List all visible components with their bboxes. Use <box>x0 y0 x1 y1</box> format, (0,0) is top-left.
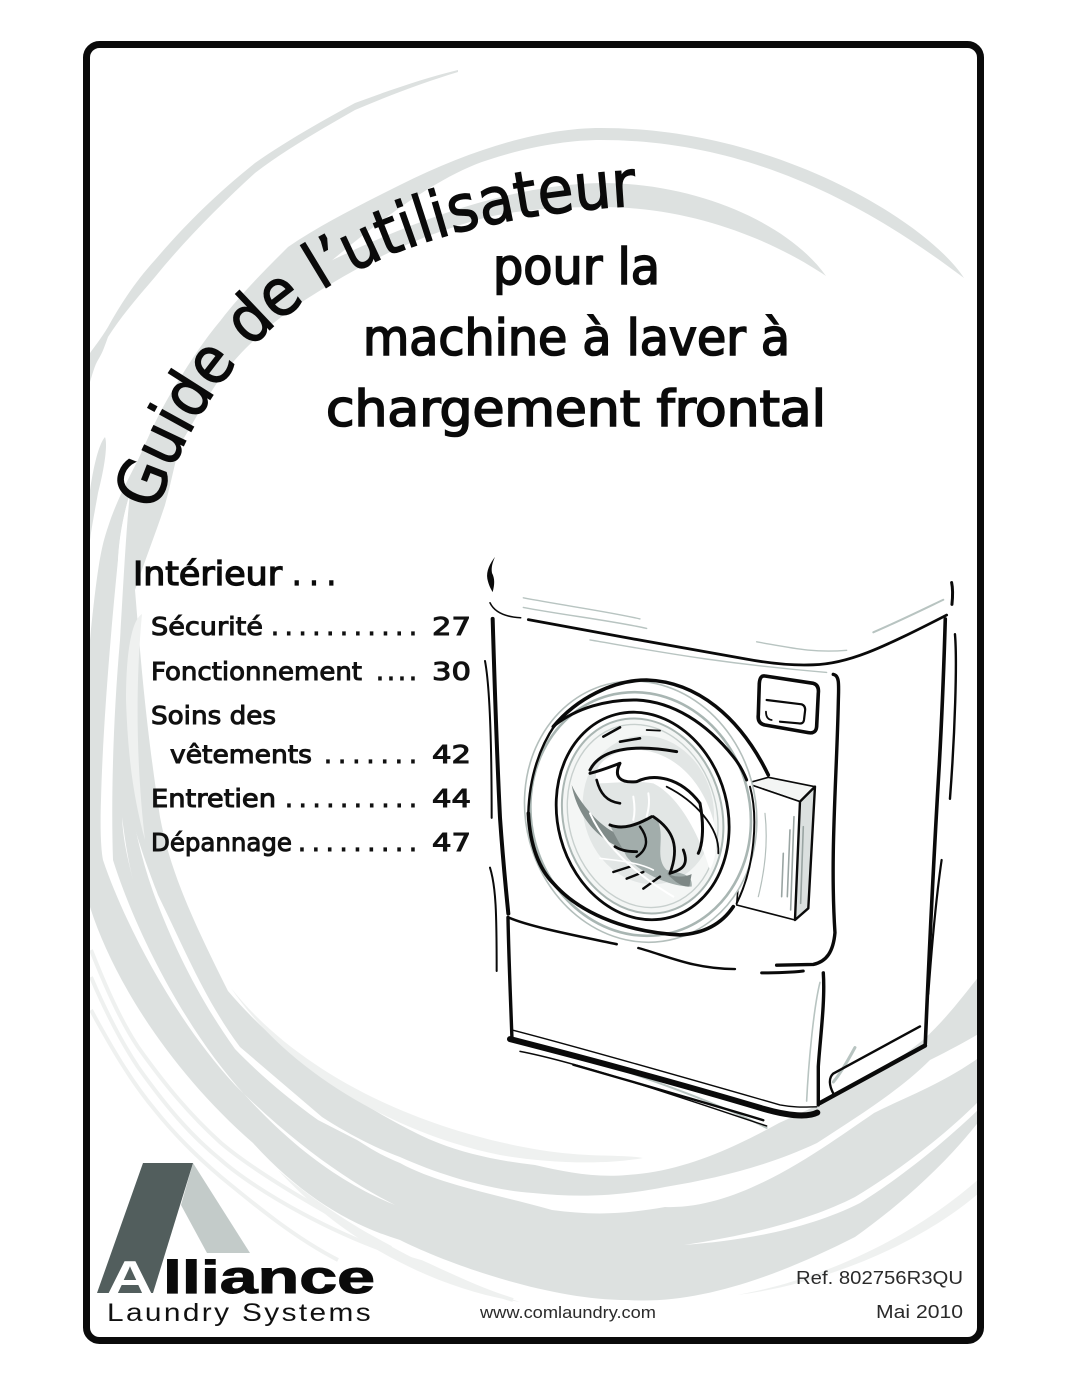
table of contents <box>151 612 471 857</box>
drum swirl <box>566 721 731 899</box>
reference number: Ref. 802756R3QU <box>796 1268 963 1288</box>
table of contents: . . . . . . . <box>324 740 417 769</box>
page frame <box>86 44 980 1340</box>
logo tagline: Laundry Systems <box>107 1299 373 1327</box>
table of contents: 42 <box>432 740 471 769</box>
logo wordmark <box>107 1251 375 1303</box>
table of contents: vêtements <box>170 740 312 769</box>
table of contents: . . . . . . . . . <box>298 828 417 857</box>
cabinet <box>485 557 956 1128</box>
table of contents: Soins des <box>151 701 276 730</box>
table of contents: Entretien <box>151 784 276 813</box>
website: www.comlaundry.com <box>479 1303 656 1322</box>
table of contents: 27 <box>432 612 471 641</box>
logo mark <box>97 1163 250 1293</box>
table of contents: Dépannage <box>151 828 292 857</box>
table of contents: 47 <box>432 828 471 857</box>
date: Mai 2010 <box>876 1302 963 1322</box>
contents heading: . . . <box>292 554 336 593</box>
background swirl <box>90 70 980 1302</box>
table of contents: 30 <box>432 657 471 686</box>
door ring <box>496 655 786 969</box>
door, drawer and handle <box>496 655 818 969</box>
logo wordmark: A <box>107 1251 153 1303</box>
contents heading: Intérieur <box>133 554 283 593</box>
table of contents: 44 <box>432 784 471 813</box>
detergent drawer <box>758 676 818 733</box>
subtitle <box>326 238 826 438</box>
curved title: Guide de l’utilisateur <box>117 168 636 504</box>
table of contents: . . . . . . . . . . <box>285 784 417 813</box>
table of contents: Sécurité <box>151 612 263 641</box>
subtitle: chargement frontal <box>326 380 826 438</box>
contents heading <box>133 554 336 593</box>
table of contents: Fonctionnement <box>151 657 362 686</box>
subtitle: pour la <box>493 238 660 296</box>
washing machine illustration <box>485 557 956 1128</box>
logo wordmark: lliance <box>163 1251 375 1303</box>
subtitle: machine à laver à <box>363 309 790 367</box>
table of contents: . . . . . . . . . . . <box>271 612 417 641</box>
table of contents: . . . . <box>376 657 417 686</box>
door handle <box>737 777 815 920</box>
